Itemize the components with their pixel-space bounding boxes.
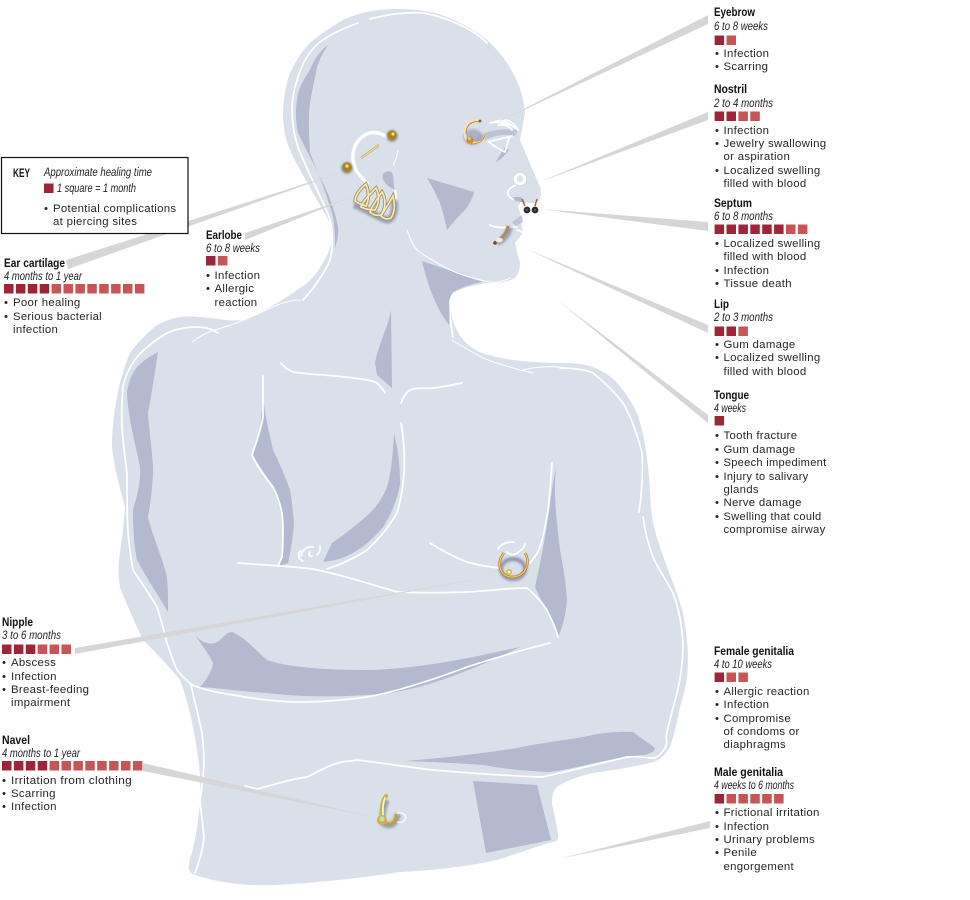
panel: tongue: Tongue (714, 390, 749, 402)
panel: eyebrow (714, 7, 769, 73)
panel: earlobe: reaction (214, 297, 257, 309)
panel: nostril: Infection (724, 125, 769, 137)
key box: Potential complications (53, 203, 176, 215)
panel: male genitalia: • (715, 821, 719, 833)
panel: nipple: • (2, 671, 6, 683)
panel: female genitalia: Compromise (724, 713, 791, 725)
jewelry: nipple ring (500, 553, 527, 579)
panel: ear cartilage: Ear cartilage (4, 258, 65, 270)
panel: male genitalia: engorgement (724, 861, 794, 873)
panel: nostril: • (715, 165, 719, 177)
panel: septum (714, 198, 820, 290)
panel: tongue: Speech impediment (724, 457, 827, 469)
panel: eyebrow: • (715, 48, 719, 60)
panel: female genitalia: • (715, 699, 719, 711)
panel: male genitalia (714, 767, 820, 873)
panel: ear cartilage: • (4, 311, 8, 323)
panel: earlobe: Allergic (214, 283, 254, 295)
panel: nipple: Nipple (2, 617, 33, 629)
panel: nipple: impairment (11, 697, 71, 709)
panel: navel: 4 months to 1 year (2, 748, 81, 760)
panel: male genitalia: 4 weeks to 6 months (714, 780, 794, 792)
panel: nostril: Jewelry swallowing (724, 138, 826, 150)
panel: male genitalia: • (715, 834, 719, 846)
panel: earlobe: 6 to 8 weeks (206, 243, 260, 255)
panel: tongue: Gum damage (724, 444, 796, 456)
panel: nipple (2, 617, 89, 709)
panel: ear cartilage: infection (13, 324, 58, 336)
key box: Approximate healing time (43, 167, 152, 179)
panel: tongue: • (715, 457, 719, 469)
panel: nostril: • (715, 125, 719, 137)
panel: navel: • (2, 801, 6, 813)
panel: tongue: • (715, 444, 719, 456)
leader: eyebrow (498, 15, 708, 122)
panel: septum: filled with blood (724, 251, 806, 263)
leader: navel (143, 763, 378, 818)
jewelry: eyebrow ring (463, 120, 485, 145)
panel: lip: Gum damage (724, 339, 796, 351)
panel: female genitalia: 4 to 10 weeks (714, 659, 772, 671)
panel: nostril: or aspiration (724, 151, 790, 163)
panel: nostril: Localized swelling (724, 165, 820, 177)
panel: lip: Lip (714, 299, 729, 311)
panel: lip: 2 to 3 months (713, 312, 773, 324)
panel: female genitalia: • (715, 686, 719, 698)
leader: septum (540, 209, 708, 231)
panel: navel: • (2, 775, 6, 787)
panel: nipple: • (2, 657, 6, 669)
panel: navel: Scarring (11, 788, 56, 800)
panel: earlobe: Earlobe (206, 230, 242, 242)
leader: nostril (537, 112, 708, 183)
panel: female genitalia: diaphragms (724, 739, 786, 751)
leader: earlobe (245, 196, 354, 240)
leader: male genitalia (558, 821, 710, 859)
panel: septum: • (715, 265, 719, 277)
key box: KEY (13, 168, 30, 180)
panel: female genitalia: • (715, 713, 719, 725)
panel: female genitalia: Infection (724, 699, 769, 711)
panel: lip: filled with blood (724, 366, 806, 378)
panel: tongue: glands (724, 484, 759, 496)
panel: septum: Localized swelling (724, 238, 820, 250)
panel: tongue: • (715, 497, 719, 509)
shading on body (127, 45, 655, 853)
panel: tongue: Swelling that could (724, 511, 822, 523)
panel: navel: Irritation from clothing (11, 775, 132, 787)
panel: septum: Septum (714, 198, 752, 210)
key box: at piercing sites (53, 216, 137, 228)
panel: eyebrow: Scarring (724, 61, 768, 73)
panel: female genitalia: of condoms or (724, 726, 800, 738)
panel: tongue: compromise airway (724, 524, 826, 536)
contour highlights (122, 13, 683, 873)
jewelry: nostril stud (513, 172, 527, 186)
panel: male genitalia: Penile (724, 847, 757, 859)
panel: male genitalia: Frictional irritation (724, 807, 820, 819)
panel: earlobe: Infection (214, 270, 260, 282)
body outline (112, 9, 688, 885)
jewelry: ear cartilage barbell (342, 130, 398, 174)
leader: lip (522, 247, 708, 333)
key box (2, 158, 188, 234)
panel: nipple: 3 to 6 months (2, 630, 61, 642)
panel: ear cartilage (4, 258, 144, 336)
panel: nipple: Infection (11, 671, 57, 683)
key box: 1 square = 1 month (57, 183, 136, 195)
panel: septum: • (715, 238, 719, 250)
panel: male genitalia: Urinary problems (724, 834, 815, 846)
panel: eyebrow: 6 to 8 weeks (714, 21, 768, 33)
panel: tongue: • (715, 471, 719, 483)
panel: female genitalia: Allergic reaction (724, 686, 810, 698)
panel: navel: Infection (11, 801, 57, 813)
panel: septum: 6 to 8 months (714, 211, 773, 223)
jewelry: lip stud (493, 226, 510, 245)
panel: lip: • (715, 339, 719, 351)
panel: nostril (713, 84, 826, 190)
panel: tongue: 4 weeks (714, 403, 746, 415)
panel: male genitalia: Infection (724, 821, 769, 833)
panel: septum: Infection (724, 265, 769, 277)
leader: tongue (556, 299, 708, 423)
panel: lip: • (715, 352, 719, 364)
panel: tongue: Nerve damage (724, 497, 802, 509)
panel: nostril: • (715, 138, 719, 150)
panel: tongue: Tooth fracture (724, 430, 797, 442)
panel: tongue: Injury to salivary (724, 471, 808, 483)
panel: ear cartilage: • (4, 297, 8, 309)
leader: nipple (75, 575, 500, 654)
key box: • (44, 203, 48, 215)
panel: lip: Localized swelling (724, 352, 820, 364)
panel: nipple: Breast-feeding (11, 684, 89, 696)
leader: ear cartilage (66, 171, 345, 269)
panel: lip (713, 299, 820, 378)
panel: tongue: • (715, 430, 719, 442)
panel: ear cartilage: 4 months to 1 year (4, 271, 83, 283)
panel: septum: Tissue death (724, 278, 792, 290)
ear outline (353, 133, 398, 205)
panel: male genitalia: Male genitalia (714, 767, 784, 779)
jewelry: earlobe rings (354, 184, 395, 220)
panel: nipple: • (2, 684, 6, 696)
panel: male genitalia: • (715, 847, 719, 859)
panel: navel: Navel (2, 735, 30, 747)
panel: ear cartilage: Poor healing (13, 297, 81, 309)
panel: nostril: 2 to 4 months (713, 98, 773, 110)
panel: eyebrow: • (715, 61, 719, 73)
panel: nostril: filled with blood (724, 178, 806, 190)
panel: nipple: Abscess (11, 657, 56, 669)
panel: ear cartilage: Serious bacterial (13, 311, 102, 323)
panel: eyebrow: Eyebrow (714, 7, 755, 19)
panel: tongue (714, 390, 827, 536)
jewelry: septum ring (522, 199, 538, 213)
panel: earlobe: • (206, 270, 210, 282)
panel: earlobe: • (206, 283, 210, 295)
panel: septum: • (715, 278, 719, 290)
panel: navel: • (2, 788, 6, 800)
jewelry: navel ring (377, 796, 406, 825)
panel: earlobe (206, 230, 260, 309)
figure: human body silhouette (112, 9, 688, 885)
panel: navel (2, 735, 142, 813)
panel: tongue: • (715, 511, 719, 523)
panel: eyebrow: Infection (724, 48, 769, 60)
panel: male genitalia: • (715, 807, 719, 819)
panel: female genitalia: Female genitalia (714, 646, 795, 658)
panel: female genitalia (714, 646, 810, 751)
panel: nostril: Nostril (714, 84, 747, 96)
